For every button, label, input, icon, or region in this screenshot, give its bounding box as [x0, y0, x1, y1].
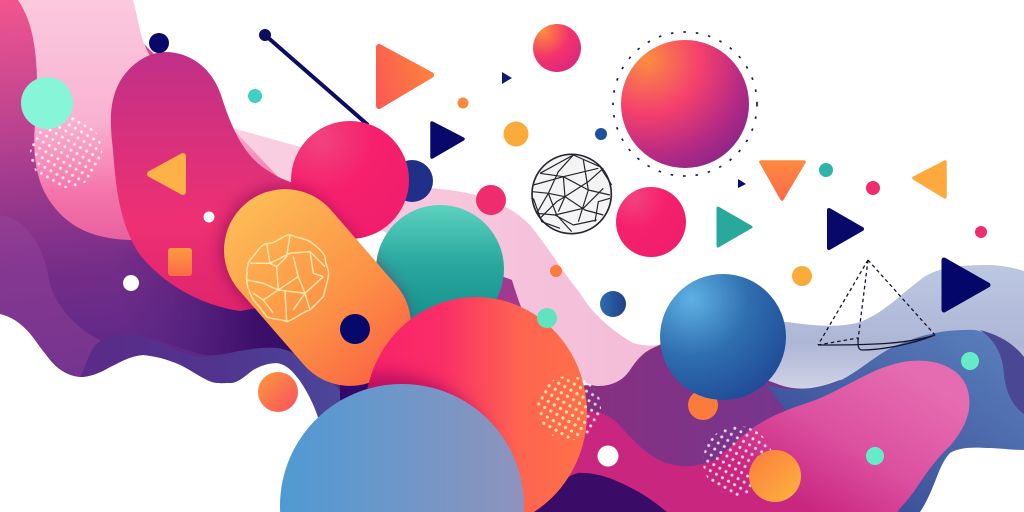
purple wedge behind teal ball	[480, 265, 530, 325]
triangle: orange down	[761, 162, 804, 199]
red-orange big circle	[365, 297, 587, 512]
orange circle lower	[749, 450, 801, 502]
lower-left lighter wave	[0, 215, 100, 377]
blue-grey wave	[700, 265, 1024, 395]
dark purple gap under capsule	[340, 380, 372, 400]
triangle: orange top	[379, 47, 431, 106]
triangle: teal	[718, 208, 751, 246]
mint dots right	[866, 352, 979, 465]
navy ball	[391, 160, 433, 202]
mint dot centre	[537, 308, 557, 328]
dark blue edge wave	[980, 330, 1024, 414]
dotted disc: top left	[30, 116, 102, 188]
pink ball mid	[616, 187, 686, 257]
capsule shadow	[212, 180, 416, 319]
triangle: navy large	[944, 260, 988, 310]
navy dot: top	[149, 33, 169, 53]
dotted disc on red circle	[537, 376, 601, 440]
orange capsule	[199, 164, 436, 411]
teal ball	[376, 205, 504, 333]
dotted disc lower	[703, 426, 773, 496]
blue circle shadow on red circle	[368, 364, 498, 430]
white dots left	[123, 212, 214, 291]
magenta blob	[111, 52, 320, 311]
blue wave	[767, 330, 1024, 512]
mint circle: top left	[21, 77, 73, 129]
small sphere top	[533, 24, 581, 72]
blue small ball	[600, 291, 626, 317]
light pink wave	[18, 0, 300, 240]
pink dot	[476, 185, 506, 215]
small dots right	[792, 163, 987, 286]
navy line with end dot	[259, 29, 368, 125]
triangle: amber left	[914, 162, 945, 197]
small dots top centre	[458, 98, 607, 146]
large sphere with dotted ring	[613, 32, 757, 176]
blue big circle	[280, 384, 524, 512]
orange triangle on magenta	[150, 156, 183, 192]
pink blob	[690, 361, 969, 512]
left gradient wave	[0, 0, 360, 420]
blue bottom wave band	[80, 335, 365, 430]
dark purple bottom wave	[530, 473, 667, 512]
navy dot on capsule	[340, 314, 370, 344]
magenta lower wave	[520, 412, 900, 512]
orange disc behind blue ball	[688, 390, 718, 420]
triangle: tiny navy 2	[738, 179, 746, 188]
wire sphere: dark	[532, 154, 612, 234]
dashed pyramid	[818, 260, 935, 350]
light pink river wave	[232, 128, 660, 386]
white dot lower	[598, 446, 618, 466]
teal dot	[248, 89, 262, 103]
wire sphere: cream	[247, 235, 329, 322]
pink ball	[291, 121, 409, 239]
orange circle bottom left	[258, 372, 298, 412]
triangle: navy right	[829, 210, 862, 248]
blue sphere	[660, 274, 786, 400]
purple wave	[560, 343, 900, 512]
triangle: navy	[432, 123, 463, 157]
dark purple shade	[110, 240, 350, 400]
orange small dot	[550, 265, 562, 277]
orange square	[168, 248, 192, 276]
triangle: tiny navy 1	[502, 72, 512, 84]
